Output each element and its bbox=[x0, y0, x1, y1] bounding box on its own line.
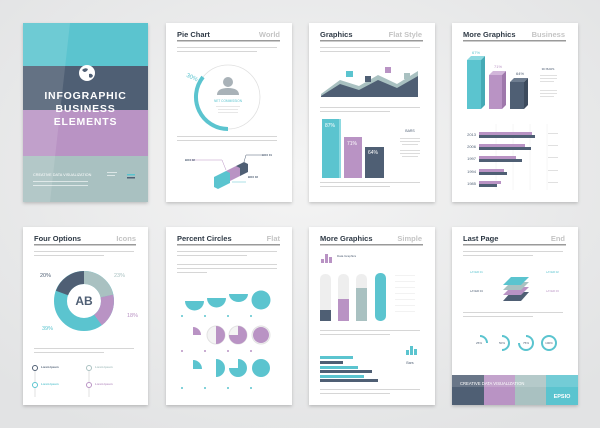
chart: iso boxes: BOX 03 bbox=[248, 175, 258, 179]
donut chart: 18% bbox=[127, 313, 138, 319]
cover title: INFOGRAPHIC bbox=[44, 90, 127, 102]
panel: graphics flat style: Graphics bbox=[320, 30, 353, 39]
horizontal bar chart: 1994 bbox=[467, 169, 477, 174]
3d bars: 67% bbox=[472, 50, 480, 55]
panel: more graphics simple: More Graphics bbox=[320, 234, 373, 243]
panel: percent circles: Percent Circles bbox=[177, 234, 232, 243]
area chart bbox=[321, 67, 418, 97]
percent rings bbox=[480, 336, 556, 350]
panel: last page: 25% bbox=[476, 341, 482, 345]
panel: more graphics simple: Data Graphics bbox=[337, 254, 357, 258]
panel: more graphics business bbox=[452, 23, 578, 202]
panel: last page bbox=[452, 227, 578, 405]
panel: four options: Four Options bbox=[34, 234, 81, 243]
panel: cover: ELEMENTS bbox=[54, 116, 117, 128]
cylinder bars bbox=[320, 273, 415, 321]
icon: small bars bbox=[321, 254, 332, 263]
bar chart bbox=[322, 119, 420, 178]
layered stack: LAYER 01 bbox=[470, 270, 483, 274]
panel: pie chart page: World bbox=[259, 30, 280, 39]
timeline list: Lorem Ipsum bbox=[41, 365, 59, 369]
footer band: CREATIVE DATA VISUALIZATION bbox=[460, 381, 524, 386]
layered stack bbox=[470, 270, 559, 301]
footer band bbox=[452, 375, 578, 405]
panel: cover: BUSINESS bbox=[55, 103, 116, 115]
chart: iso boxes bbox=[185, 153, 272, 189]
3d bars: 71% bbox=[494, 64, 502, 69]
panel: percent circles bbox=[166, 227, 292, 405]
horizontal bar chart: 1997 bbox=[467, 156, 477, 161]
panel: more graphics business: Business bbox=[532, 30, 565, 39]
panel: graphics flat style: Flat Style bbox=[389, 30, 422, 39]
panel: four options: Icons bbox=[116, 234, 136, 243]
chart: iso boxes: BOX 02 bbox=[185, 158, 195, 162]
timeline list: Lorem Ipsum bbox=[95, 382, 113, 386]
chart: net commission circle bbox=[185, 65, 260, 129]
panel: more graphics simple: Simple bbox=[397, 234, 422, 243]
timeline list bbox=[32, 365, 113, 397]
horizontal bar chart bbox=[467, 124, 558, 190]
bar chart: 87% bbox=[325, 123, 336, 129]
donut chart: 23% bbox=[114, 273, 125, 279]
horizontal bar chart: 2013 bbox=[467, 132, 477, 137]
chart: net commission circle: 30% bbox=[185, 73, 199, 84]
panel: more graphics business: More Graphics bbox=[463, 30, 516, 39]
3d bars: 3D BARS bbox=[542, 67, 554, 71]
heading: Pie Chart bbox=[177, 30, 210, 39]
panel: last page: 75% bbox=[523, 341, 529, 345]
bar chart: BARS bbox=[405, 129, 415, 133]
layered stack: LAYER 04 bbox=[470, 289, 483, 293]
panel: cover bbox=[23, 23, 148, 202]
donut chart: 39% bbox=[42, 326, 53, 332]
timeline list: Lorem Ipsum bbox=[95, 365, 113, 369]
panel: last page: End bbox=[551, 234, 565, 243]
horizontal bar chart: 1985 bbox=[467, 181, 477, 186]
panel: last page: 100% bbox=[545, 341, 553, 345]
panel: pie chart page bbox=[166, 23, 292, 202]
panel: last page: Last Page bbox=[463, 234, 498, 243]
layered stack: LAYER 02 bbox=[546, 270, 559, 274]
panel: four options bbox=[23, 227, 148, 405]
timeline list: Lorem Ipsum bbox=[41, 382, 59, 386]
horizontal bars: Bars bbox=[406, 361, 414, 365]
donut chart bbox=[40, 273, 138, 332]
panel: graphics flat style bbox=[309, 23, 435, 202]
footer band: EPSIO bbox=[554, 394, 571, 400]
3d bars: 64% bbox=[516, 71, 524, 76]
horizontal bars bbox=[320, 346, 417, 382]
layered stack: LAYER 03 bbox=[546, 289, 559, 293]
cover subtitle: CREATIVE DATA VISUALIZATION bbox=[33, 173, 92, 177]
circle row 2 bbox=[193, 326, 270, 344]
icon: globe bbox=[79, 65, 95, 81]
bar chart: 71% bbox=[347, 141, 358, 147]
chart: iso boxes: BOX 01 bbox=[262, 153, 272, 157]
bar chart: 64% bbox=[368, 150, 379, 156]
donut chart: AB bbox=[75, 294, 93, 308]
panel: last page: 50% bbox=[499, 341, 505, 345]
donut chart: 20% bbox=[40, 273, 51, 279]
circle row 1 bbox=[185, 290, 270, 310]
circle row 3 bbox=[193, 359, 270, 377]
chart: net commission circle: NET COMMISSION bbox=[214, 99, 243, 103]
panel: percent circles: Flat bbox=[267, 234, 280, 243]
3d bars bbox=[467, 50, 557, 109]
horizontal bar chart: 2006 bbox=[467, 144, 477, 149]
panel: more graphics simple bbox=[309, 227, 435, 405]
